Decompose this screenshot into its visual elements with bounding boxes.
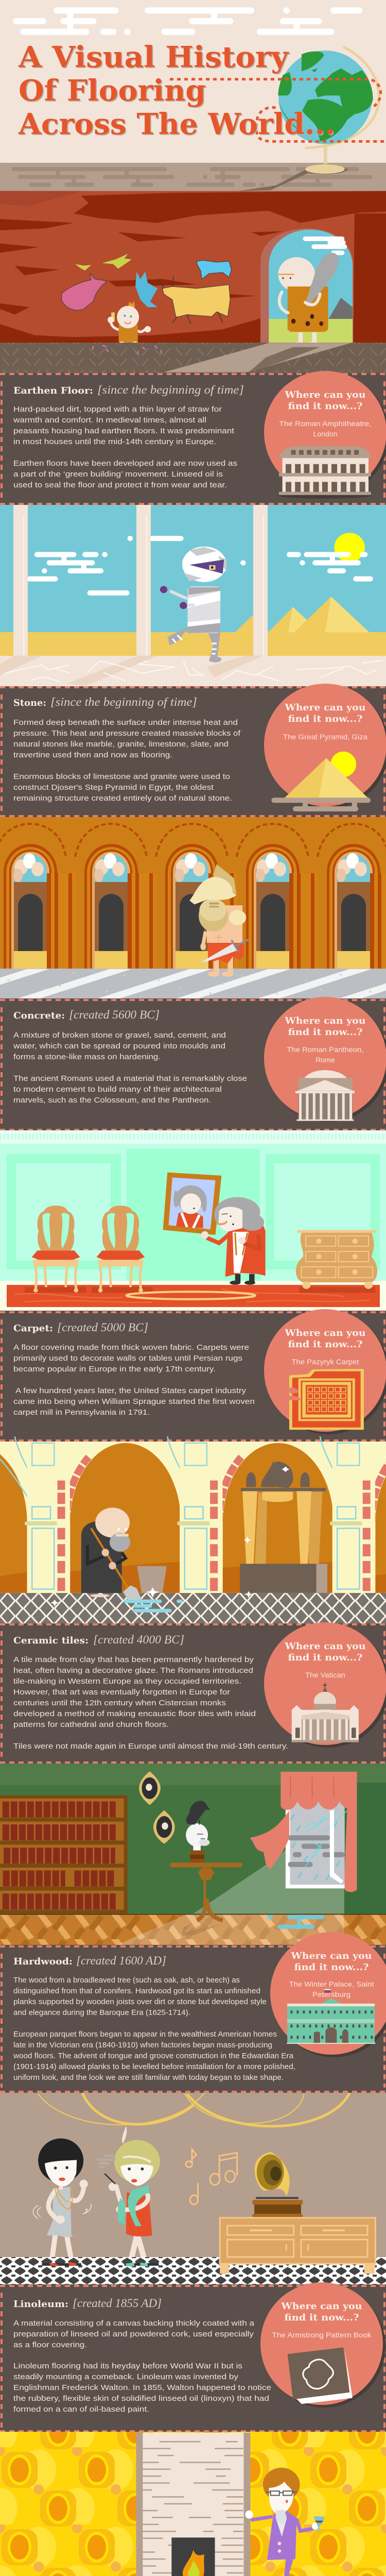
character: baby [108, 301, 151, 349]
wainscot clouds [13, 169, 371, 184]
body text: water, which can be spread or poured into moulds and [13, 1042, 225, 1050]
scene: stone, Egypt with mummy [0, 505, 386, 686]
panel: hardwood [0, 1932, 386, 2093]
callout: where can you find it: find it now...? [294, 1962, 369, 1973]
scene: hardwood, gothic library [0, 1764, 386, 1946]
columns [13, 505, 268, 656]
body text: to modern cement to build many of their architectural [13, 1085, 222, 1094]
blue outlines in spandrels [0, 1436, 349, 1504]
light from window [193, 1850, 344, 1913]
body text: formed on a can of oil-based paint. [13, 2405, 149, 2414]
heading: [created 5000 BC] [57, 1321, 148, 1334]
body text: marvels, such as the Colosseum, and the Pantheon. [13, 1096, 211, 1105]
wainscot [0, 163, 386, 191]
altar [240, 1461, 327, 1593]
background wall [0, 0, 386, 163]
callout: where can you find it: The Winter Palace, Saint [289, 1980, 374, 1988]
dotted flight path [170, 79, 386, 141]
callout: where can you find it: find it now...? [288, 1027, 362, 1038]
body text: pressure. This heat and pressure created massive blocks of [13, 729, 241, 738]
clouds [29, 538, 371, 593]
callout: where can you find it: Rome [315, 1056, 335, 1064]
body text: However, that art was eventually forgotten in Europe for [13, 1688, 230, 1697]
body text: A few hundred years later, the United States carpet industry [15, 1386, 247, 1395]
character: wigged man [201, 1197, 266, 1285]
body text: A mixture of broken stone or gravel, sand, cement, and [13, 1031, 226, 1040]
row of arches [0, 824, 386, 979]
linoleum floor [0, 2257, 386, 2285]
body text: Hard-packed dirt, topped with a thin layer of straw for [13, 405, 222, 414]
heading: [created 5600 BC] [69, 1008, 160, 1021]
body text [13, 1976, 295, 2082]
character: man in purple suit [245, 2468, 324, 2576]
panel: earthen floor [0, 371, 386, 505]
body text: preparation of linseed oil and powdered cork, used especially [13, 2330, 254, 2338]
callout: where can you find it: Where can you [284, 1328, 365, 1338]
fireplace [120, 2433, 266, 2576]
heading: Hardwood: [13, 1956, 73, 1967]
body text: A tile made from clay that has been permanently hardened by [13, 1655, 254, 1664]
musical notes [186, 2149, 237, 2205]
callout: where can you find it: The Pazyryk Carpet [291, 1358, 359, 1366]
body text: warmth and comfort. In medieval times, almost all [13, 416, 206, 425]
callout: where can you find it: Where can you [284, 1641, 365, 1652]
callout: where can you find it: The Great Pyramid, Giza [283, 733, 367, 741]
body text [13, 1031, 247, 1105]
framed portrait [163, 1173, 221, 1235]
body text: centuries until the 12th century when Cistercian monks [13, 1699, 226, 1707]
callout: where can you find it: The Vatican [305, 1671, 345, 1679]
light from window [164, 343, 352, 372]
scene: earthen floor header and cave [0, 0, 386, 373]
callout: where can you find it: Where can you [284, 702, 365, 713]
character: gladiator [189, 864, 249, 977]
callout: where can you find it [264, 1309, 386, 1434]
body text: A floor covering made from thick woven fabric. Carpets were [13, 1343, 249, 1352]
body text: the rubbery, flexible skin of solidified linseed oil (linoxyn) that had [13, 2394, 269, 2403]
grass marks [75, 254, 132, 270]
body text: used to seal the floor and protect it from wear and tear. [13, 481, 227, 489]
heading: Earthen Floor: [13, 385, 93, 396]
body text: natural stones like marble, granite, limestone, slate, and [13, 740, 229, 749]
callout: where can you find it: find it now...? [288, 1339, 362, 1350]
callout: where can you find it: Petersburg [312, 1990, 350, 1998]
callout: where can you find it [260, 2282, 385, 2408]
caveman [278, 257, 315, 292]
callout: where can you find it: London [313, 430, 337, 438]
heading: [created 1855 AD] [73, 2297, 162, 2310]
icon: pyramid [274, 752, 368, 809]
scene: carpet, regency room [0, 1130, 386, 1312]
chairs [32, 1206, 145, 1293]
icon: pattern book [288, 2347, 353, 2404]
heading: [created 4000 BC] [93, 1633, 184, 1646]
body text: A material consisting of a canvas backing thickly coated with a [13, 2319, 255, 2328]
body text: in most houses until the mid-14th century in Europe. [13, 437, 216, 446]
window with storm [286, 1800, 347, 1888]
callout: where can you find it: The Armstrong Pattern Book [272, 2331, 372, 2339]
body text: planks supported by wooden joists over dirt or stone but developed style [13, 1997, 267, 2006]
cave paintings [62, 254, 232, 324]
callout: where can you find it: Where can you [290, 1951, 372, 1961]
body text: Englishman Frederick Walton. In 1855, Walton happened to notice [13, 2383, 271, 2392]
icon: gramophone [252, 2152, 303, 2217]
bookcase [0, 1795, 128, 1913]
icon: vatican [292, 1683, 359, 1742]
icon: colosseum [278, 446, 372, 499]
body text: travertine used then and now as flooring. [13, 751, 172, 759]
callout: where can you find it [264, 1622, 386, 1748]
callout: where can you find it: Where can you [284, 1015, 365, 1026]
body text: uniform look, and the look we are still familiar with today began to take shape. [13, 2073, 284, 2082]
body text: construct Djoser's Step Pyramid in Egypt, the oldest [13, 783, 214, 792]
pink voussoirs [66, 1457, 386, 1522]
dresser [296, 1230, 377, 1289]
callout: where can you find it: find it now...? [288, 714, 362, 724]
heading [13, 1954, 166, 1967]
callout: where can you find it: The Roman Pantheon, [287, 1045, 363, 1054]
body text: developed a method of making encaustic floor tiles with inlaid [13, 1709, 256, 1718]
blue bull [197, 260, 232, 279]
body text: steadily mounting a comeback. Linoleum was invented by [13, 2372, 239, 2381]
arched openings [0, 1436, 386, 1593]
green wall [0, 1764, 386, 1914]
round table with bust and crow [172, 1801, 240, 1935]
character: dancing woman [33, 2139, 91, 2262]
wall portraits [139, 1771, 175, 1844]
heading: Concrete: [13, 1010, 65, 1021]
callout: where can you find it: Where can you [280, 2301, 362, 2312]
tiled floor [0, 1593, 386, 1624]
red earth wall [0, 191, 386, 343]
title: A Visual History [18, 40, 289, 74]
callout: where can you find it: Where can you [284, 389, 365, 400]
mop head, puddle and sparkles [51, 1466, 289, 1611]
panel: ceramic tiles [0, 1622, 386, 1764]
heading [13, 1321, 148, 1334]
body text: European parquet floors began to appear in the wealthiest American homes [13, 2030, 277, 2039]
title: Of Flooring [19, 74, 206, 108]
marble floor [0, 656, 386, 686]
body text [13, 1655, 288, 1751]
decorative clouds [16, 10, 359, 32]
heading: [created 1600 AD] [76, 1954, 166, 1967]
body text: heat, often having a decorative glaze. The Romans introduced [13, 1666, 253, 1675]
body text [13, 718, 241, 803]
icon: winter palace [287, 1989, 375, 2044]
body text: remaining structure created entirely out of natural stone. [13, 794, 232, 803]
callout: where can you find it [270, 1932, 386, 2057]
body text: wood floors. The advent of tongue and groove construction in the Edwardian Era [13, 2052, 294, 2060]
heading: [since the beginning of time] [50, 696, 197, 708]
body text [13, 405, 237, 489]
body text [13, 1343, 255, 1417]
body text: came into being when William Sprague started the first woven [13, 1397, 255, 1406]
scene: concrete, colosseum arches with gladiator [0, 817, 386, 999]
character: mummy [160, 586, 221, 663]
body text: carpet mill in Pennsylvania in 1791. [13, 1408, 150, 1417]
concrete floor [0, 969, 386, 999]
wall panels [0, 1144, 386, 1297]
panel: linoleum [0, 2282, 386, 2432]
character: monk [81, 1507, 167, 1594]
callout: where can you find it [264, 997, 386, 1122]
columns [25, 1442, 375, 1596]
body text: patterns for cathedral and church floors. [13, 1720, 169, 1729]
title [18, 40, 335, 141]
sky [0, 505, 386, 632]
body text [13, 2319, 271, 2414]
heading [13, 1633, 184, 1646]
callout: where can you find it: find it now...? [288, 1652, 362, 1663]
callout: where can you find it: The Roman Amphitheatre, [279, 419, 372, 428]
body text: The ancient Romans used a material that is remarkably close [13, 1074, 247, 1083]
curtains [250, 1772, 357, 1892]
heading [13, 1008, 160, 1021]
callout: where can you find it: find it now...? [288, 401, 362, 412]
scene: linoleum, 1920s room [0, 2093, 386, 2285]
body text: tile-making in Western Europe as they occupied territories. [13, 1677, 241, 1686]
heading [13, 383, 244, 396]
floor light and puddle [116, 1914, 344, 1945]
body text: Tiles were not made again in Europe until almost the mid-19th century. [13, 1742, 288, 1751]
body text: late in the Victorian era (1840-1910) when factories began mass-producing [13, 2041, 272, 2049]
yellow bull [163, 285, 230, 317]
callout: where can you find it [264, 684, 386, 809]
body text: a part of the ‘green building’ movement. Linseed oil is [13, 470, 223, 479]
sun [335, 533, 365, 562]
body text: became popular in Europe in the early 17th century. [13, 1365, 216, 1374]
garlands [38, 2093, 349, 2126]
frieze [0, 1130, 386, 1144]
panel: carpet [0, 1309, 386, 1442]
body text: (1901-1914) allowed planks to be levelled before installation for a more polished, [13, 2062, 295, 2071]
heading [13, 2297, 162, 2310]
blue hand [135, 272, 157, 307]
floor: dirt with chevrons [0, 343, 386, 373]
body text: as a floor covering. [13, 2341, 87, 2349]
panel: concrete [0, 997, 386, 1131]
pyramids [235, 597, 369, 632]
heading: Ceramic tiles: [13, 1635, 89, 1646]
heading: Stone: [13, 698, 46, 708]
parquet floor [0, 1914, 386, 1946]
body text: distinguished from that of conifers. Hardwood got its start as unfinished [13, 1987, 260, 1995]
panel: stone [0, 684, 386, 817]
heading: [since the beginning of time] [97, 383, 244, 396]
title: Across The World... [18, 107, 335, 141]
pink bison [62, 274, 107, 310]
skirting and carpet [0, 1281, 386, 1312]
body text: forms a stone-like mass on hardening. [13, 1053, 161, 1061]
icon: pantheon [295, 1070, 355, 1121]
heading: Linoleum: [13, 2299, 68, 2310]
icon: pazyryk carpet [287, 1369, 364, 1430]
body text: peasants housing had earthen floors. It was predominant [13, 427, 235, 435]
cave window with caveman [260, 228, 353, 346]
heading: Carpet: [13, 1323, 53, 1334]
callout: where can you find it [264, 371, 386, 499]
body text: Linoleum flooring had its heyday before World War II but is [13, 2362, 242, 2370]
icon: globe [239, 47, 379, 191]
sand [0, 632, 386, 656]
scene: ceramic tiles, cathedral with monk [0, 1436, 386, 1624]
scene: 1950s retro wallpaper and fireplace [0, 2432, 386, 2576]
character: woman with scarf [98, 2126, 160, 2263]
confetti [93, 345, 161, 354]
body text: Enormous blocks of limestone and granite were used to [13, 772, 230, 781]
body text: primarily used to decorate walls or tables until Persian rugs [13, 1354, 242, 1363]
body text: Earthen floors have been developed and are now used as [13, 459, 237, 468]
body text: The wood from a broadleaved tree (such as oak, ash, or beech) as [13, 1976, 240, 1985]
body text: and elegance during the Baroque Era (1625-1714). [13, 2008, 190, 2017]
shoes and sideboard [42, 2218, 375, 2274]
callout: where can you find it: find it now...? [284, 2312, 359, 2323]
body text: Formed deep beneath the surface under intense heat and [13, 718, 238, 727]
